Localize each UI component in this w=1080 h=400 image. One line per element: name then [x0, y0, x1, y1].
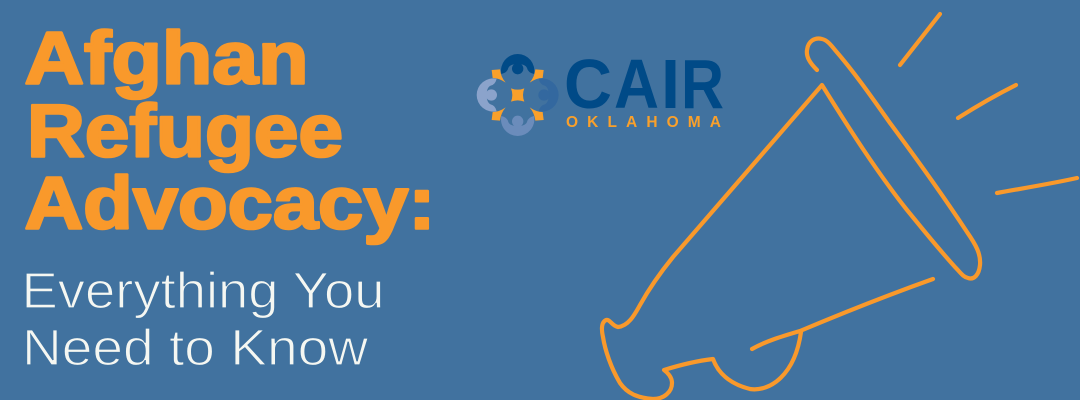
title: Advocacy:: [24, 162, 435, 244]
logo wordmark: C: [564, 45, 612, 123]
title: Refugee: [27, 90, 343, 172]
logo wordmark: [564, 45, 724, 123]
sound ray top: [900, 14, 940, 65]
logo sub-wordmark: OKLAHOMA: [566, 114, 721, 131]
logo wordmark: A: [614, 45, 659, 123]
subtitle: [22, 262, 384, 376]
title: Afghan: [24, 16, 308, 100]
sound ray bottom: [997, 178, 1077, 193]
title: [24, 16, 435, 244]
figure bottom: [501, 116, 534, 136]
figure right: [538, 78, 559, 112]
logo: CAIR Oklahoma: [477, 45, 724, 136]
subtitle: Need to Know: [22, 319, 368, 376]
subtitle: Everything You: [22, 262, 384, 319]
orange accents: [492, 69, 544, 121]
logo wordmark: I: [661, 45, 680, 123]
sound ray middle: [958, 85, 1016, 118]
megaphone handle line: [752, 279, 933, 349]
icon: four figures emblem: [477, 54, 559, 136]
figure left: [477, 78, 497, 112]
megaphone body: [602, 38, 980, 399]
icon: megaphone: [602, 14, 1077, 399]
figure top: [501, 54, 534, 74]
logo wordmark: R: [681, 45, 724, 123]
